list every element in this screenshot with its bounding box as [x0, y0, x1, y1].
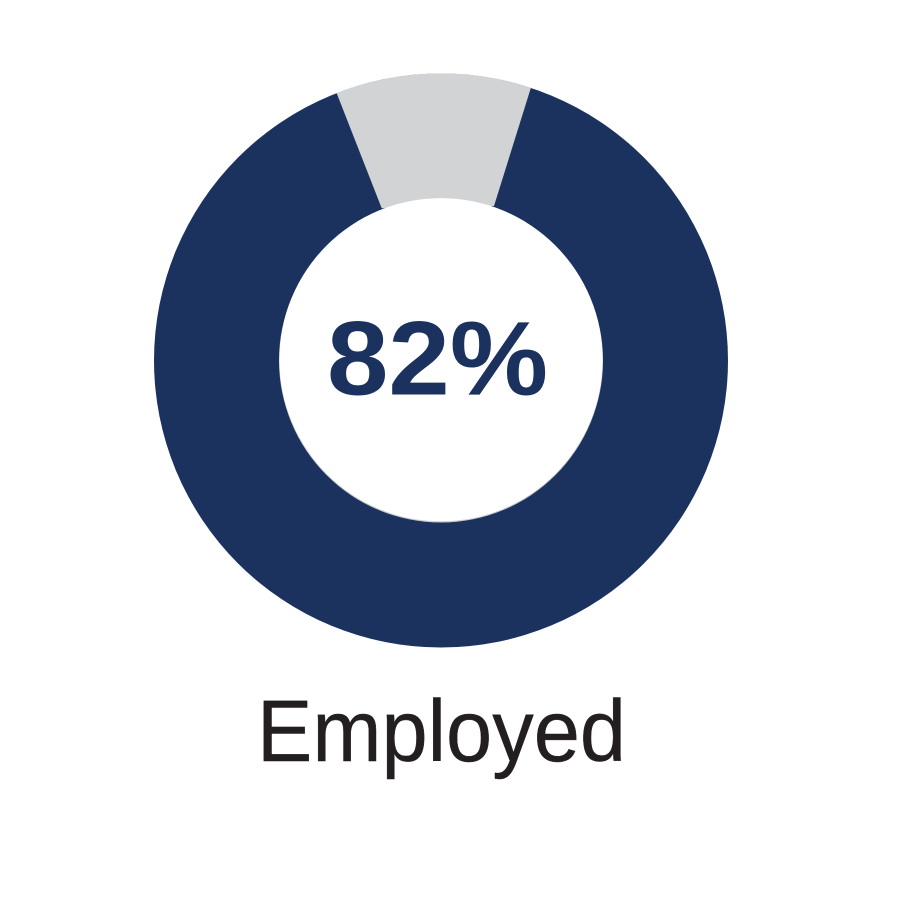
- thin grey rim under the hole: [279, 198, 603, 522]
- donut hole: [279, 198, 603, 521]
- donut chart: [154, 73, 728, 647]
- label: Employed: Employed: [257, 683, 626, 780]
- percentage value: 82%: [327, 300, 548, 418]
- ring segment: remaining share: [337, 73, 531, 208]
- ring segment: employed 82%: [154, 74, 728, 648]
